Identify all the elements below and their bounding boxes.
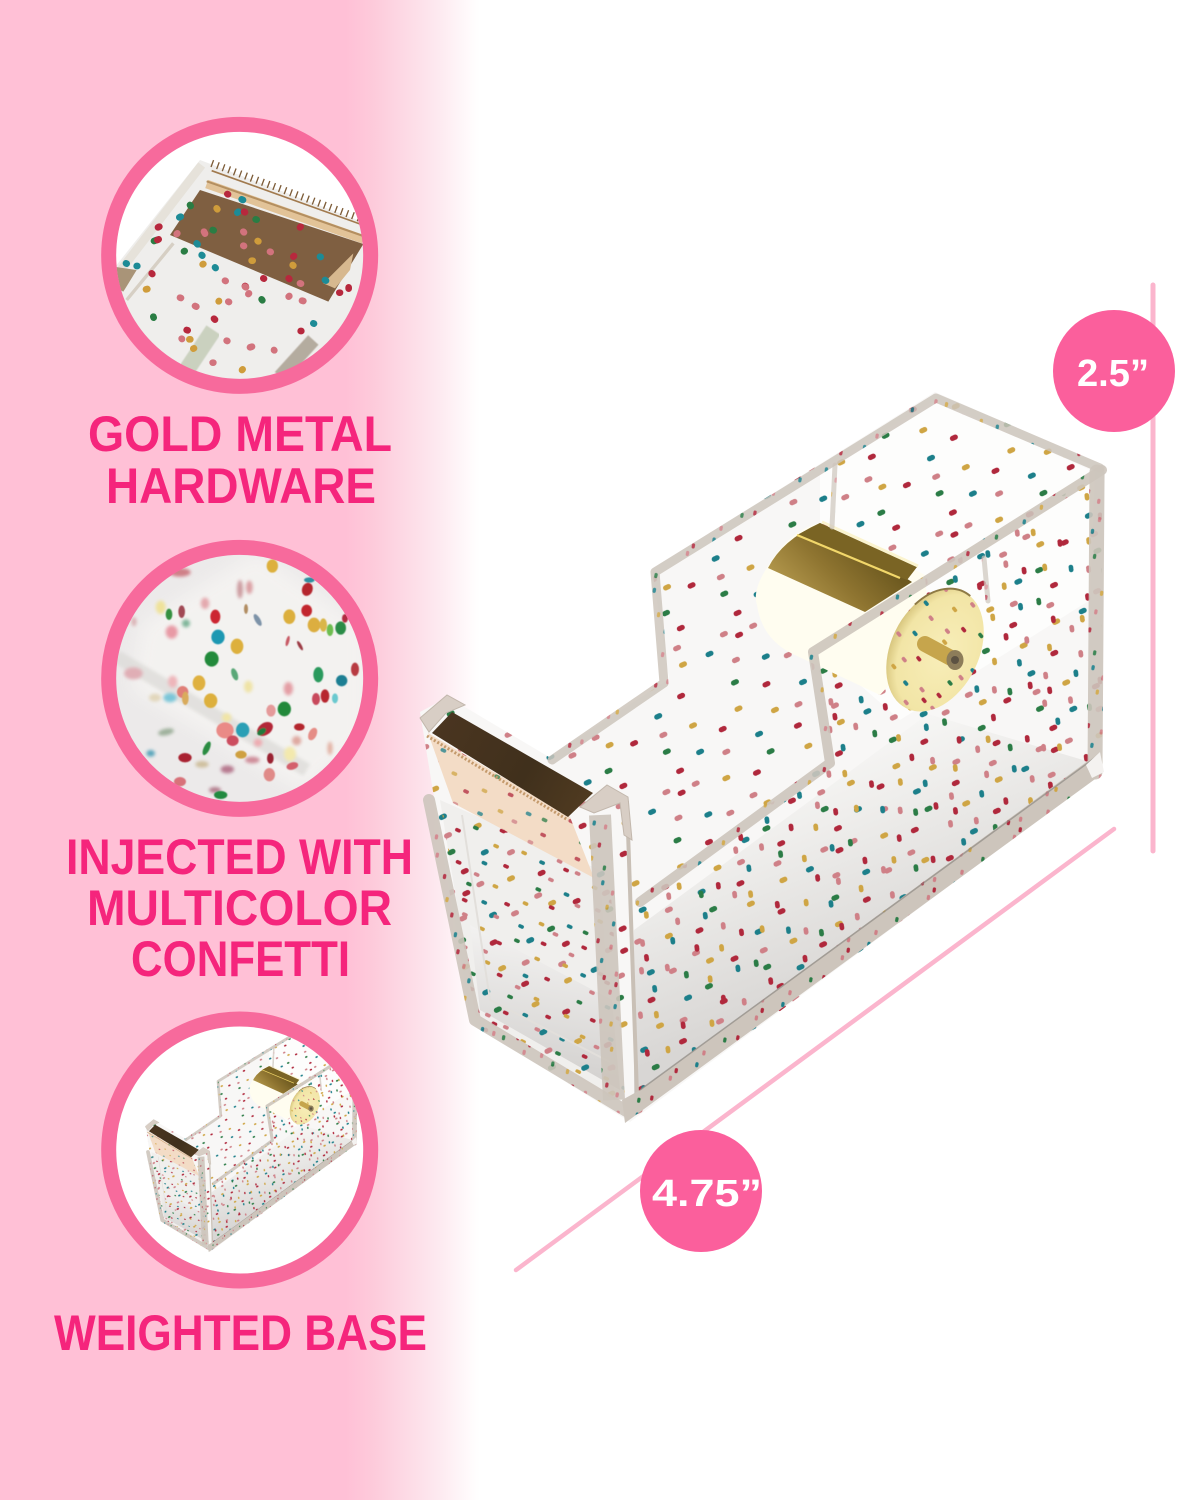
heading: gold metal hardware: HARDWARE [106, 458, 376, 514]
heading: gold metal hardware [88, 406, 392, 514]
width badge [640, 1130, 762, 1252]
heading: injected with multicolor confetti: MULTICOLOR [87, 880, 392, 936]
sharp confetti [166, 559, 359, 799]
height badge: 2.5” [1077, 353, 1149, 395]
circle: gold metal hardware close-up [109, 124, 371, 387]
confetti in close-up [126, 194, 349, 370]
circle image [110, 550, 370, 810]
height badge [1053, 310, 1175, 432]
heading: injected with multicolor confetti: CONFETTI [131, 931, 350, 987]
width dimension line [516, 829, 1114, 1270]
heading: injected with multicolor confetti: INJECTED WITH [66, 829, 413, 885]
ring [109, 124, 371, 386]
heading: injected with multicolor confetti [66, 829, 413, 987]
circle image [116, 1026, 364, 1274]
ring [109, 547, 371, 809]
height dimension line [1150, 285, 1156, 851]
circle: weighted base mini dispenser [100, 1010, 380, 1290]
width badge: 4.75” [652, 1173, 762, 1215]
main product: confetti tape dispenser [420, 392, 1105, 1123]
blurred confetti [124, 568, 333, 793]
circle image [110, 127, 370, 387]
heading: weighted base: WEIGHTED BASE [54, 1305, 427, 1361]
heading: gold metal hardware: GOLD METAL [88, 406, 392, 462]
ring [109, 1019, 371, 1281]
pink gradient background [0, 0, 480, 1500]
circle: multicolor confetti close-up [109, 547, 371, 810]
